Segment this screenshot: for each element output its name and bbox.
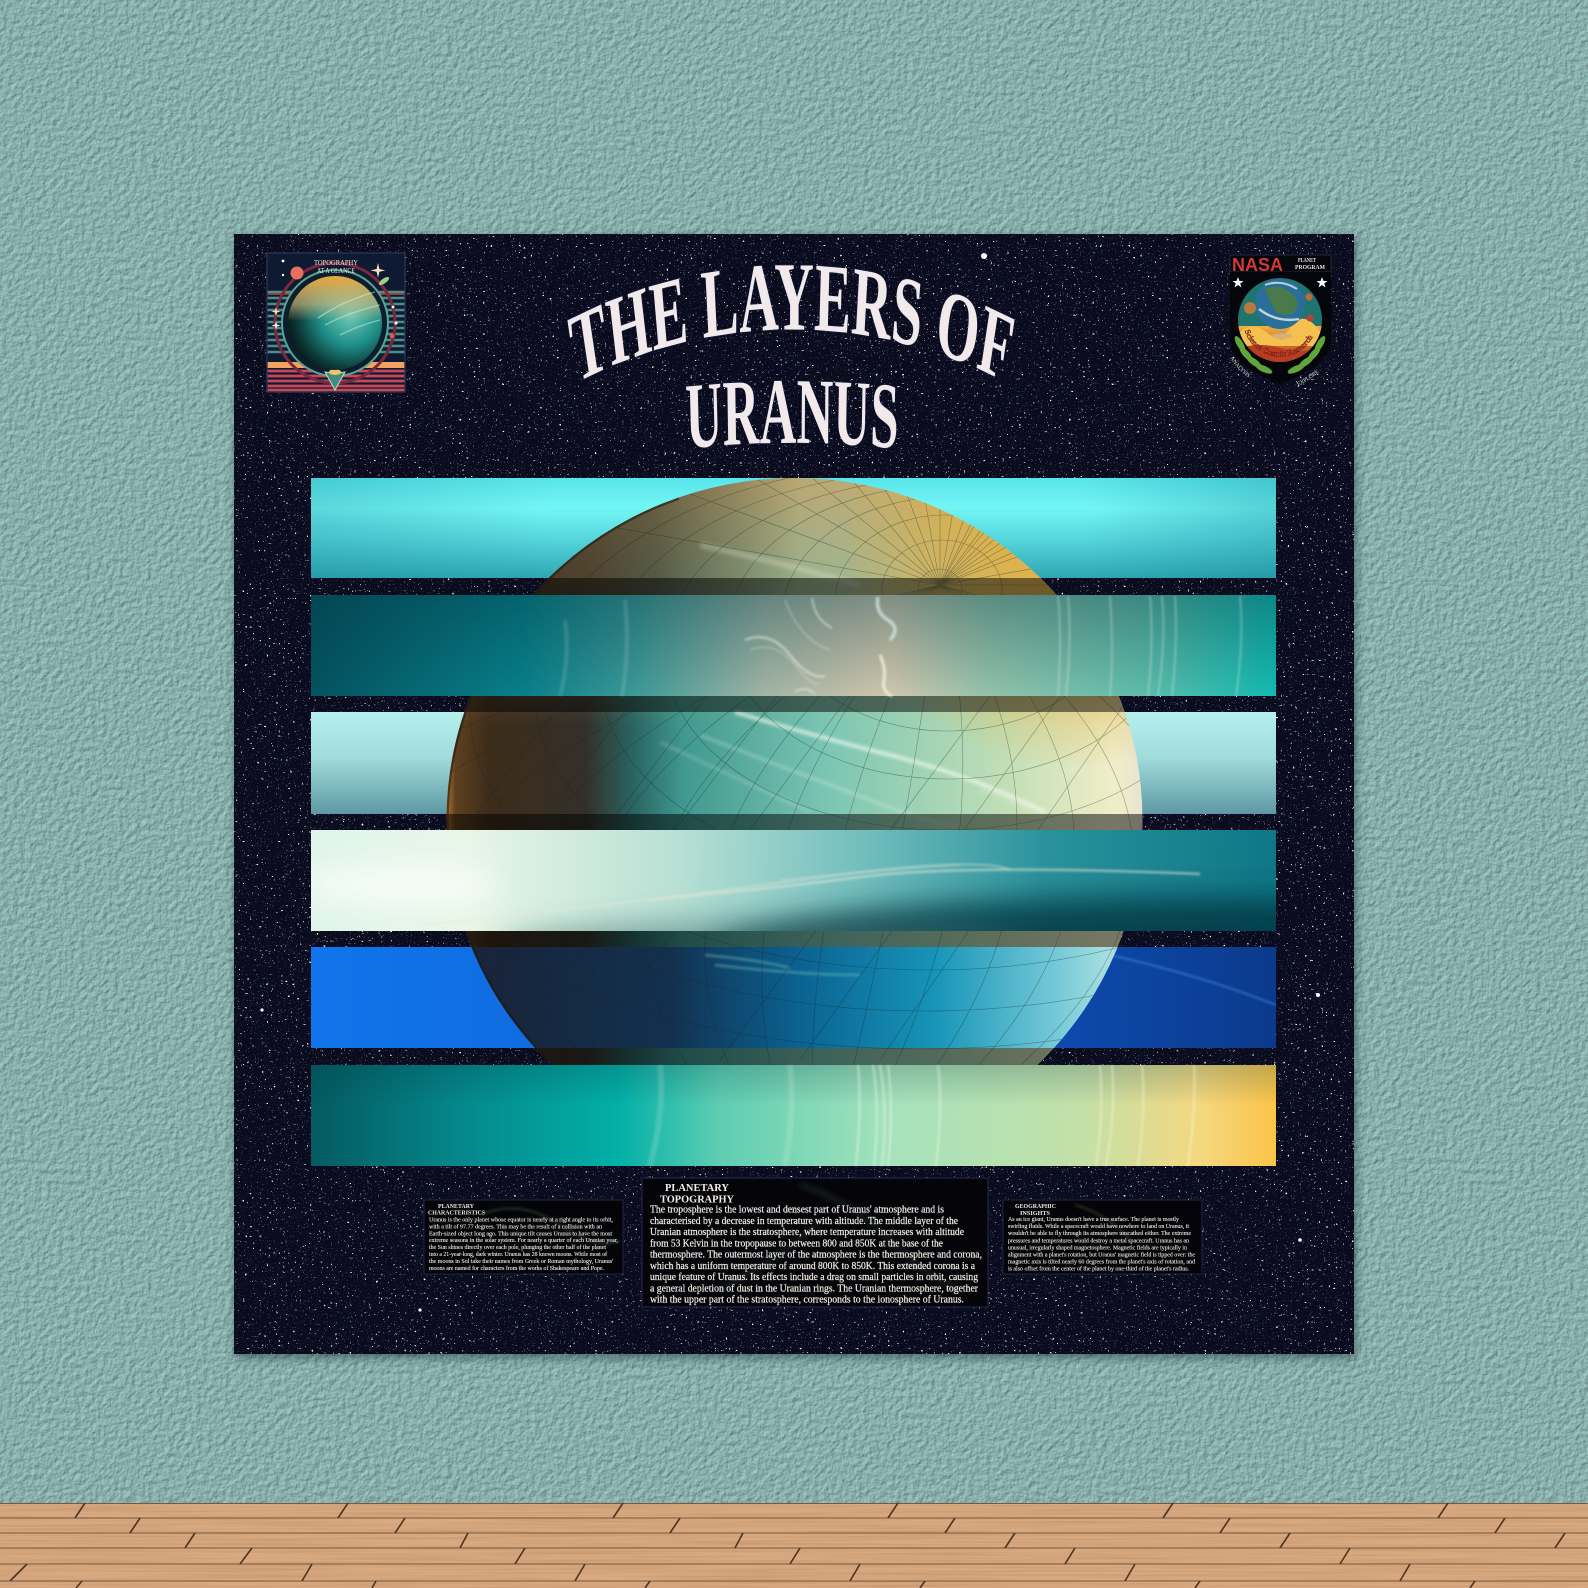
strip 4: pale clouds fading to dark teal [311, 830, 1276, 931]
heading: INSIGHTS [1020, 1210, 1050, 1217]
body text: magnetic axis is tilted nearly 60 degrees from the planet's axis of rotation, and [1008, 1259, 1196, 1266]
badge planet [288, 276, 382, 370]
body text: extreme seasons in the solar system. For nearly a quarter of each Uranian year, [429, 1237, 618, 1244]
strip 6: teal to golden band [311, 1065, 1276, 1166]
central planet with latitude and longitude grid [446, 478, 1142, 1065]
Earth [1255, 279, 1305, 329]
body text: which has a uniform temperature of around 800K to 850K. This extended corona is a [650, 1261, 976, 1272]
heading: PLANETARY [438, 1203, 474, 1210]
body text: characterised by a decrease in temperature with altitude. The middle layer of the [650, 1216, 959, 1227]
badge: topography at a glance [267, 253, 405, 392]
dark shading in the gaps between strips [440, 578, 1150, 1065]
heading: PLANETARY [665, 1182, 729, 1194]
planet grid lines [450, 478, 1140, 1065]
body text: with a tilt of 97.77 degrees. This may be the result of a collision with an [429, 1223, 603, 1230]
body text: unique feature of Uranus. Its effects include a drag on small particles in orbit, causing [650, 1272, 978, 1283]
shield captions [1228, 356, 1321, 388]
badge: topography at a glance: AT A GLANCE [317, 267, 355, 275]
small comet [378, 277, 390, 285]
body text: swirling fluids. While a spacecraft would have nowhere to land on Uranus, it [1008, 1223, 1189, 1230]
strip 3: pale cyan band [311, 712, 1276, 814]
program label [1295, 258, 1325, 271]
body text: pressures and temperatures would destroy a metal spacecraft. Uranus has an [1008, 1237, 1190, 1244]
panel: planetary characteristics [424, 1200, 623, 1274]
heading: TOPOGRAPHY [660, 1194, 734, 1206]
heading [1015, 1203, 1056, 1217]
body text: As an ice giant, Uranus doesn't have a true surface. The planet is mostly [1008, 1216, 1180, 1223]
body text: alignment with a planet's rotation, but Uranus' magnetic field is tipped over: the [1008, 1252, 1195, 1258]
badge: NASA planet program shield [1230, 254, 1332, 386]
body text: moons are named for characters from the works of Shakespeare and Pope. [429, 1265, 604, 1272]
motto ribbon: Science Cosmic Research [1244, 330, 1313, 357]
body text: the Sun shines directly over each pole, plunging the other half of the planet [429, 1244, 606, 1251]
strip 2: teal band with swirls [311, 595, 1276, 696]
title line 1: THE LAYERS OF [567, 264, 1016, 380]
program label: PLANET [1298, 258, 1316, 264]
body text: Earth-sized object long ago. This unique tilt causes Uranus to have the most [429, 1230, 612, 1237]
program label: PROGRAM [1295, 265, 1325, 271]
body text: unusual, irregularly shaped magnetosphere. Magnetic fields are typically in [1008, 1244, 1188, 1251]
wooden floor [0, 1503, 1588, 1588]
body text: Uranus is the only planet whose equator is nearly at a right angle to its orbit, [429, 1216, 613, 1224]
planet storm bands [660, 545, 1060, 830]
body text: Uranian atmosphere is the stratosphere, where temperature increases with altitude [650, 1227, 965, 1238]
strip 5: deep blue band [311, 947, 1276, 1048]
shield captions: EXPLORE [1296, 370, 1319, 386]
panel: planetary topography [642, 1178, 988, 1307]
laurels [1233, 335, 1327, 376]
body text: wouldn't be able to fly through its atmosphere unscathed either. The extreme [1008, 1230, 1191, 1237]
heading [428, 1203, 485, 1216]
body text: the moons in Sol take their names from Greek or Roman mythology, Uranus' [429, 1258, 613, 1265]
body text: a general depletion of dust in the Uranian rings. The Uranian thermosphere, together [650, 1283, 979, 1294]
body text: into a 21-year-long, dark winter. Uranus has 28 known moons. While most of [429, 1251, 608, 1258]
title line 2: URANUS [686, 380, 897, 449]
heading: CHARACTERISTICS [428, 1210, 485, 1216]
panel: geographic insights [1003, 1200, 1202, 1274]
body text: is also offset from the center of the planet by one-third of the planet's radius. [1008, 1266, 1189, 1273]
lower planet blue section [440, 947, 1150, 1048]
body text: The troposphere is the lowest and densest part of Uranus' atmosphere and is [650, 1204, 944, 1216]
body text [1008, 1216, 1196, 1273]
body text: thermosphere. The outermost layer of the atmosphere is the thermosphere and corona, [650, 1250, 982, 1260]
body text: from 53 Kelvin in the tropopause to between 800 and 850K at the base of the [650, 1238, 944, 1249]
body text [429, 1216, 618, 1272]
strip 1: upper atmosphere band [311, 478, 1276, 578]
small moon [290, 266, 304, 280]
NASA wordmark: NASA [1232, 255, 1283, 275]
badge caption: TOPOGRAPHY [314, 259, 358, 267]
shield captions: ANALYSIS [1230, 357, 1250, 378]
body text [650, 1204, 982, 1306]
poster shadow [236, 238, 1356, 1358]
body text: with the upper part of the stratosphere, corresponds to the ionosphere of Uranus. [650, 1294, 964, 1306]
heading: GEOGRAPHIC [1015, 1203, 1056, 1210]
poster: starfield background [234, 234, 1354, 1354]
heading [660, 1182, 734, 1206]
planet limb rim [446, 498, 679, 1048]
